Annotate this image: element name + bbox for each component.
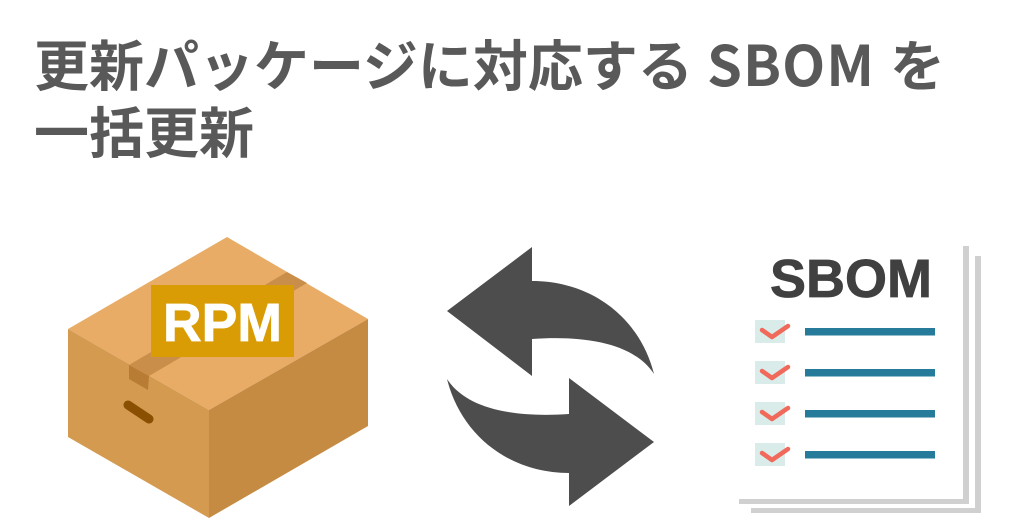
arrow: pointing left bbox=[447, 247, 654, 376]
box handle bbox=[128, 405, 149, 419]
arrow: pointing right bbox=[447, 378, 654, 506]
box left face bbox=[68, 329, 209, 518]
icon: SBOM document bbox=[739, 246, 981, 513]
title: 一括更新 bbox=[34, 89, 254, 169]
document shadow front bbox=[739, 246, 969, 504]
title: SBOM bbox=[707, 22, 875, 103]
document shadow back bbox=[751, 256, 981, 513]
checklist row 1 bbox=[755, 320, 935, 343]
icon: exchange arrows bbox=[447, 247, 654, 506]
title: を bbox=[890, 22, 945, 102]
RPM label bbox=[151, 285, 294, 357]
tape flap bbox=[129, 365, 149, 390]
title: 更新パッケージに対応する bbox=[34, 22, 693, 102]
checklist row 3 bbox=[755, 402, 935, 425]
box right face bbox=[209, 319, 368, 518]
title bbox=[34, 22, 945, 169]
icon: RPM cardboard box bbox=[68, 237, 368, 518]
packing tape bbox=[129, 272, 307, 376]
checklist row 2 bbox=[755, 361, 935, 384]
SBOM heading: SBOM bbox=[770, 249, 932, 309]
box top face bbox=[68, 237, 368, 410]
RPM label: RPM bbox=[163, 294, 282, 353]
checklist row 4 bbox=[755, 443, 935, 466]
